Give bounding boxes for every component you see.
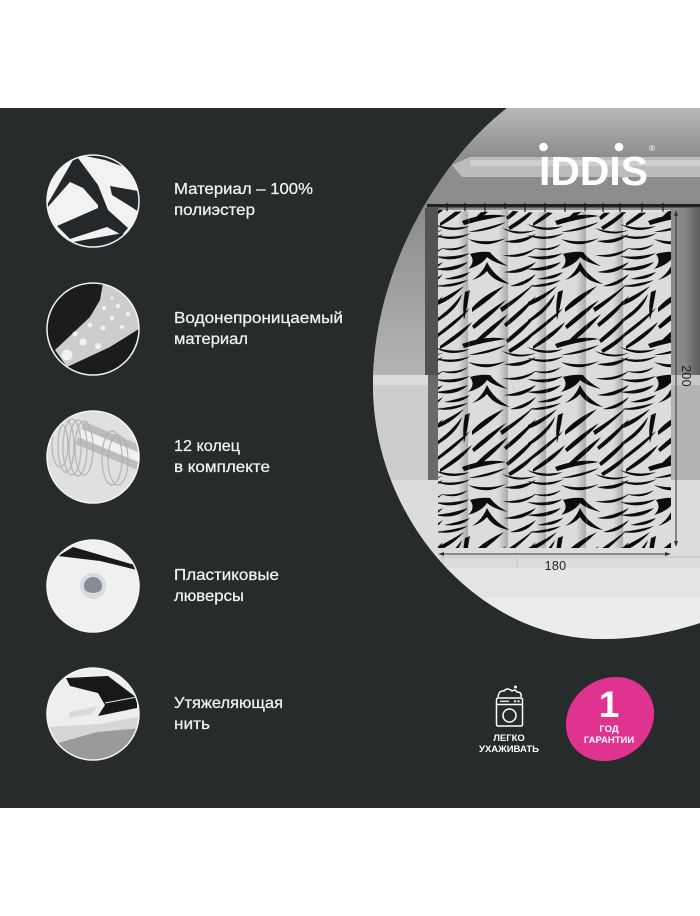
zebra curtain (438, 209, 671, 548)
text: waterproof: Водонепроницаемый (174, 310, 343, 327)
curtain rod with hooks (427, 203, 700, 212)
text: material: полиэстер (174, 202, 255, 219)
text: rings (174, 438, 270, 476)
label: easy care (479, 733, 539, 755)
text: rings: в комплекте (174, 459, 270, 476)
feature 2: waterproof (45, 281, 343, 377)
text: waterproof (174, 310, 343, 348)
height dimension 200: 200 (679, 365, 693, 387)
icon: plastic grommet (48, 540, 138, 632)
brand logo: IDDIS (539, 148, 648, 194)
width dimension 180 (438, 552, 671, 573)
text: waterproof: материал (174, 331, 248, 348)
warranty text (584, 684, 634, 746)
text: grommets (174, 567, 279, 605)
warranty text: ГАРАНТИИ (584, 735, 634, 746)
feature 4: grommets (45, 538, 279, 634)
feature 5: weighted thread (45, 666, 283, 765)
ring (47, 155, 139, 247)
height dimension 200 (674, 210, 693, 547)
warranty badge (549, 660, 671, 778)
feature 3: rings (45, 409, 270, 505)
warranty text: 1 (599, 684, 619, 725)
text: material: Материал – 100% (174, 181, 313, 198)
text: weighted thread: Утяжеляющая (174, 695, 283, 712)
icon: weighted hem (48, 668, 138, 760)
icon: zebra fabric close-up (48, 156, 138, 245)
text: weighted thread: нить (174, 716, 210, 733)
ring (47, 540, 139, 632)
width dimension 180: 180 (545, 559, 566, 573)
text: grommets: Пластиковые (174, 567, 279, 584)
text: rings: 12 колец (174, 438, 240, 455)
bathroom photo blob (370, 108, 700, 643)
warranty text: ГОД (599, 724, 619, 735)
ring (47, 668, 139, 760)
brand logo: ® (649, 144, 655, 153)
ring (47, 411, 139, 503)
icon: washing machine (496, 689, 522, 726)
label: easy care: УХАЖИВАТЬ (479, 744, 539, 755)
pink blob (549, 660, 671, 778)
ring (47, 283, 139, 375)
dark background panel (0, 108, 700, 808)
text: grommets: люверсы (174, 588, 244, 605)
icon: rings on rod (48, 412, 138, 502)
icon: water drops on fabric (48, 284, 138, 374)
text: weighted thread (174, 695, 283, 733)
feature 1: material (45, 153, 313, 250)
text: material (174, 181, 313, 219)
easy care badge (479, 686, 539, 755)
label: easy care: ЛЕГКО (493, 733, 525, 744)
